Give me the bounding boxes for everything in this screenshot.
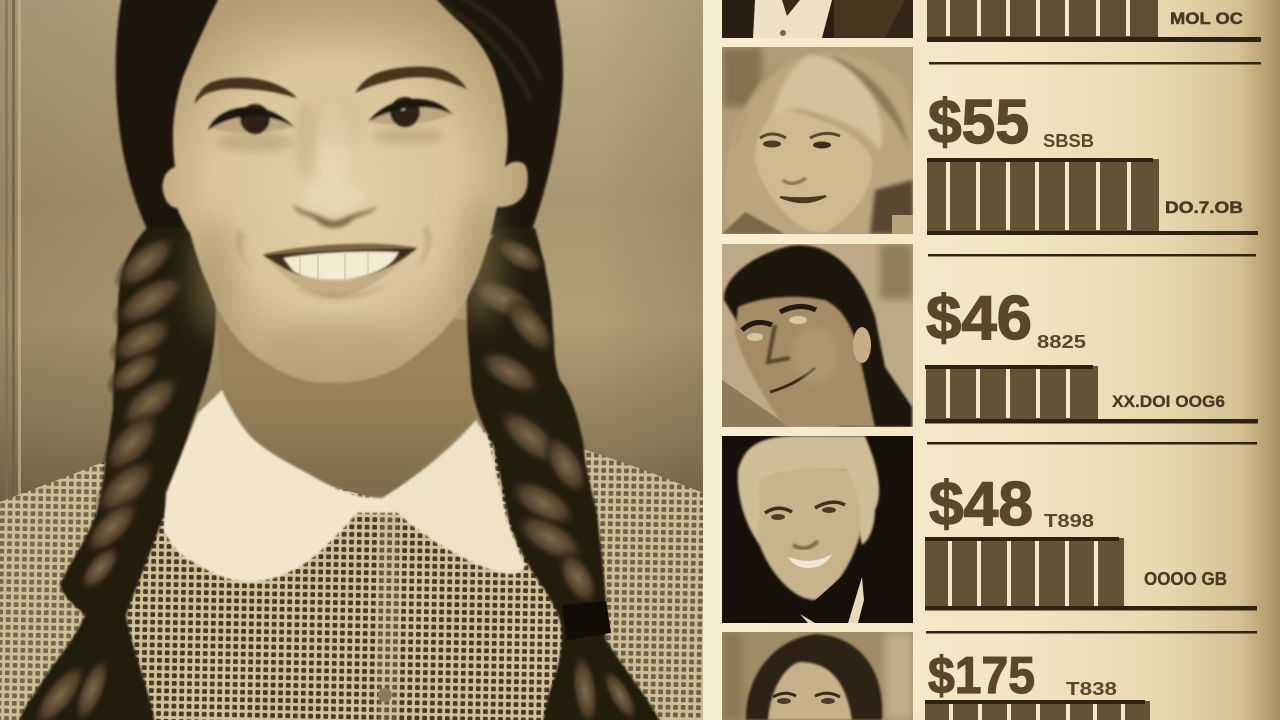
row 4 chart: $48: OOOO GB: [1144, 569, 1227, 589]
row 4 chart: $48: T898: [1044, 511, 1094, 531]
left braid: [18, 222, 216, 720]
thumbnail 3: dark-haired man: [722, 244, 913, 427]
row 2 chart: $55: $55: [928, 88, 1029, 157]
nose: [292, 180, 377, 228]
row 3 chart: $46$: 8825: [1037, 332, 1086, 352]
thumbnail 2: woman with feathered hair: [722, 47, 915, 234]
row 1 chart: [927, 0, 1261, 42]
thumbnail 4: blond man: [722, 436, 913, 623]
neck: [216, 312, 475, 454]
right brow: [355, 67, 467, 93]
thumbnail 5: man (cropped): [722, 632, 913, 720]
left eye: [208, 104, 295, 134]
row 2 chart: $55: DO.7.OB: [1165, 198, 1243, 217]
panel: main portrait photo: [0, 0, 704, 720]
right eye: [368, 97, 453, 127]
braid tie: [562, 601, 611, 640]
panel: earnings column: [703, 0, 1280, 720]
smile: [236, 225, 432, 300]
left brow: [195, 78, 297, 104]
dress: [0, 430, 704, 720]
row 2 chart: $55: SBSB: [1043, 131, 1094, 151]
row 4 chart: $48: [925, 470, 1257, 610]
collar: [164, 390, 525, 582]
backdrop shading: [0, 0, 703, 502]
row 3 chart: $46$: XX.DOI OOG6: [1112, 392, 1225, 411]
row 5 chart: $175: T838: [1066, 679, 1117, 699]
right braid: [463, 227, 662, 720]
thumbnail 1: man in suit (cropped): [722, 0, 913, 38]
row 3 chart: $46$: $46: [926, 284, 1032, 353]
row 2 chart: $55: [927, 88, 1258, 235]
face: [162, 0, 528, 383]
row 3 chart: $46$: [925, 284, 1258, 424]
cheek and chin shading: [193, 0, 500, 367]
row 4 chart: $48: $48: [929, 470, 1033, 539]
hair mass: [116, 0, 563, 235]
row 1 chart: MOL OC: [1170, 9, 1243, 28]
row 5 chart: $175: [925, 647, 1150, 720]
row 5 chart: $175: $175: [928, 647, 1035, 705]
